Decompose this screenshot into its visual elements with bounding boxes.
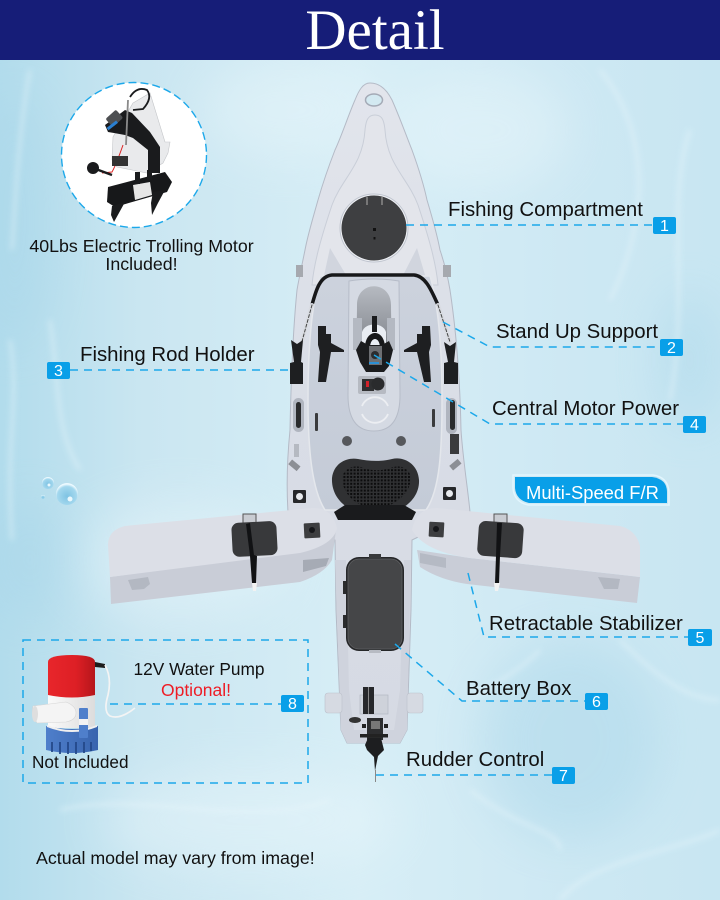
pump title: 12V Water Pump bbox=[134, 659, 264, 679]
label 4: central motor power: 4 bbox=[690, 417, 699, 434]
fishing compartment hatch bbox=[340, 194, 408, 262]
hull fittings bbox=[288, 265, 462, 503]
label 2: stand up support bbox=[496, 321, 683, 357]
label 4: central motor power bbox=[492, 398, 706, 434]
label 6: battery box: 6 bbox=[592, 694, 601, 711]
kayak top view bbox=[108, 83, 640, 782]
label 4: central motor power: Central Motor Power bbox=[492, 398, 679, 420]
label 3: fishing rod holder bbox=[47, 344, 255, 380]
label 6: battery box bbox=[466, 678, 608, 711]
label 7: rudder control: 7 bbox=[559, 768, 568, 785]
bubbles bbox=[41, 477, 78, 505]
header band bbox=[0, 0, 720, 60]
disclaimer: Actual model may vary from image! bbox=[36, 848, 315, 868]
optional note: Optional! bbox=[161, 680, 231, 700]
label 1: fishing compartment bbox=[448, 199, 676, 235]
label 2: stand up support: Stand Up Support bbox=[496, 321, 658, 343]
main hull bbox=[287, 83, 470, 743]
label 1: fishing compartment: Fishing Compartment bbox=[448, 199, 643, 221]
title: Detail bbox=[305, 0, 445, 62]
label 5: retractable stabilizer: 5 bbox=[696, 630, 705, 647]
label 5: retractable stabilizer: Retractable Stabilizer bbox=[489, 613, 683, 635]
trolling motor inset: Included! bbox=[105, 254, 178, 274]
icon: trolling motor bbox=[87, 89, 172, 222]
label 3: fishing rod holder: 3 bbox=[54, 363, 63, 380]
multi-speed badge: Multi-Speed F/R bbox=[526, 482, 659, 503]
seat bbox=[332, 458, 419, 520]
label 8 bbox=[281, 695, 304, 713]
multi-speed badge bbox=[513, 475, 669, 505]
panel: water pump bbox=[23, 640, 308, 783]
motor caption: 40Lbs Electric Trolling Motor bbox=[29, 236, 254, 256]
central motor power mount bbox=[356, 316, 393, 372]
battery box hatch bbox=[343, 554, 404, 653]
left stabilizer bbox=[108, 508, 337, 604]
label 2: stand up support: 2 bbox=[667, 340, 676, 357]
label 6: battery box: Battery Box bbox=[466, 678, 571, 700]
label 5: retractable stabilizer bbox=[489, 613, 712, 647]
pump caption: Not Included bbox=[32, 752, 129, 772]
stand up support bar bbox=[301, 275, 450, 345]
right stabilizer bbox=[412, 508, 640, 603]
label 3: fishing rod holder: Fishing Rod Holder bbox=[80, 344, 255, 366]
label 7: rudder control bbox=[406, 749, 575, 785]
label 1: fishing compartment: 1 bbox=[660, 218, 669, 235]
bow recess bbox=[312, 115, 438, 285]
icon: water pump bbox=[32, 655, 135, 754]
label 7: rudder control: Rudder Control bbox=[406, 749, 544, 771]
leader lines bbox=[70, 225, 688, 775]
label 8: 8 bbox=[288, 696, 297, 713]
center console bbox=[348, 279, 400, 431]
rudder control bbox=[349, 687, 388, 782]
fishing rod holders bbox=[290, 326, 458, 384]
trolling motor inset bbox=[29, 82, 254, 274]
cockpit floor bbox=[308, 276, 442, 510]
